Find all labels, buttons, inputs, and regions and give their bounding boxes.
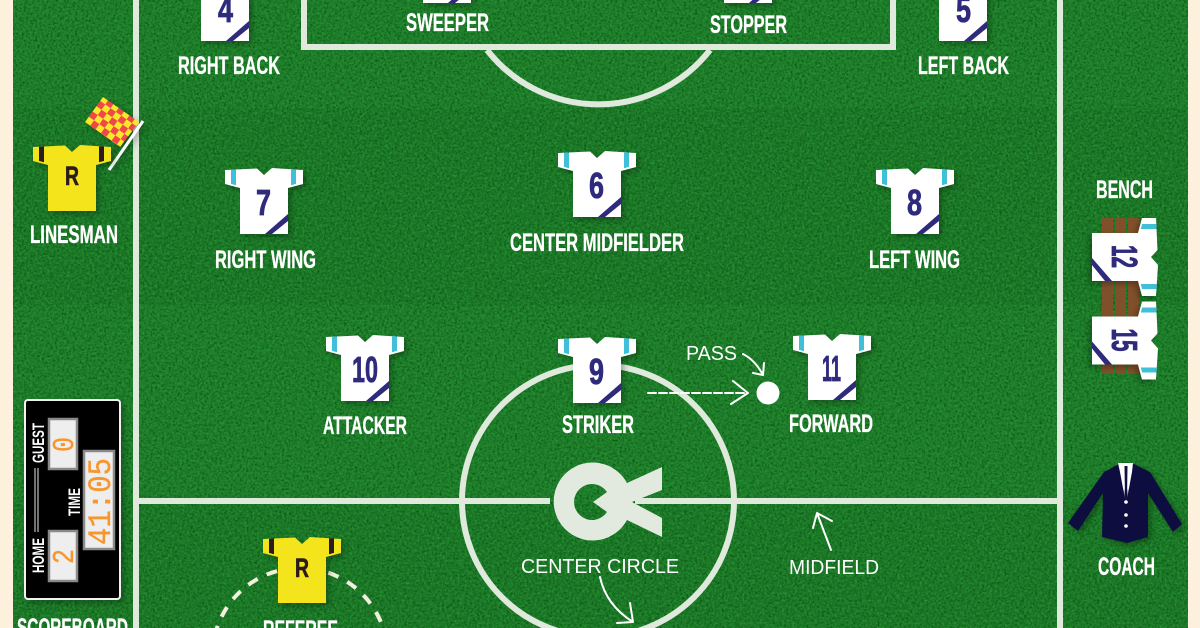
pass label arrow: [743, 354, 764, 375]
guest score box: [48, 419, 83, 469]
label: linesman: LINESMAN: [30, 221, 118, 249]
label: left back: LEFT BACK: [918, 52, 1009, 80]
dashed pass arrow: [648, 381, 748, 404]
center circle annotation: [521, 556, 679, 623]
midfield label: MIDFIELD: [789, 557, 879, 579]
shirt 10: [326, 335, 404, 401]
shirt 9: [558, 337, 636, 403]
home label: HOME: [29, 538, 48, 573]
shirt 10: 10: [352, 349, 378, 390]
label: right back: RIGHT BACK: [178, 52, 280, 80]
shirt 6: 6: [589, 165, 604, 206]
linesman shirt: [33, 145, 111, 211]
center logo: [554, 462, 662, 540]
scoreboard: [25, 400, 120, 599]
pass label: PASS: [686, 343, 737, 365]
label: center midfielder: CENTER MIDFIELDER: [510, 229, 684, 257]
shirt 4: [186, 0, 264, 41]
field lines: [136, 0, 1060, 628]
board: [25, 400, 120, 599]
coach jacket: [1068, 463, 1182, 543]
shirt: stopper: [709, 0, 787, 3]
shirt 7: [225, 168, 303, 234]
time box: 41:05: [83, 458, 120, 545]
linesman flag: [85, 97, 143, 170]
shirt 12: 12: [1104, 245, 1145, 268]
label: forward: FORWARD: [789, 410, 873, 438]
label: stopper: STOPPER: [710, 11, 787, 39]
pass annotation: [648, 343, 780, 404]
shirt 11: [793, 334, 871, 400]
shirt 6: [558, 151, 636, 217]
label: left wing: LEFT WING: [869, 246, 960, 274]
shirt 8: [876, 168, 954, 234]
bench planks: [1102, 218, 1139, 374]
midfield annotation: [789, 513, 879, 579]
home score box: 2: [48, 549, 83, 564]
time label: TIME: [65, 488, 84, 516]
label: right wing: RIGHT WING: [215, 246, 316, 274]
shirt: sweeper: [408, 0, 486, 3]
shirt 15: 15: [1104, 328, 1145, 352]
shirt 7: 7: [256, 182, 271, 223]
ball: [756, 382, 780, 404]
shirt 12: [1092, 218, 1158, 296]
label: striker: STRIKER: [562, 411, 634, 439]
label: bench: BENCH: [1096, 176, 1153, 204]
shirt 5: [924, 0, 1002, 41]
referee shirt: R: [295, 553, 309, 583]
label: attacker: ATTACKER: [323, 412, 407, 440]
center circle label: CENTER CIRCLE: [521, 556, 679, 578]
shirt 11: 11: [822, 348, 841, 389]
midfield arrow: [813, 513, 832, 550]
referee shirt: [263, 537, 341, 603]
center circle arrow: [600, 577, 633, 623]
linesman shirt: R: [65, 161, 79, 191]
label: sweeper: SWEEPER: [406, 9, 489, 37]
label: coach: COACH: [1098, 553, 1155, 581]
home score box: [48, 531, 83, 581]
referee circle: [212, 568, 388, 628]
guest score box: 0: [48, 437, 83, 452]
shirt 9: 9: [589, 351, 604, 392]
shirt 15: [1092, 302, 1158, 380]
shirt 8: 8: [907, 182, 922, 223]
guest label: GUEST: [29, 423, 48, 463]
